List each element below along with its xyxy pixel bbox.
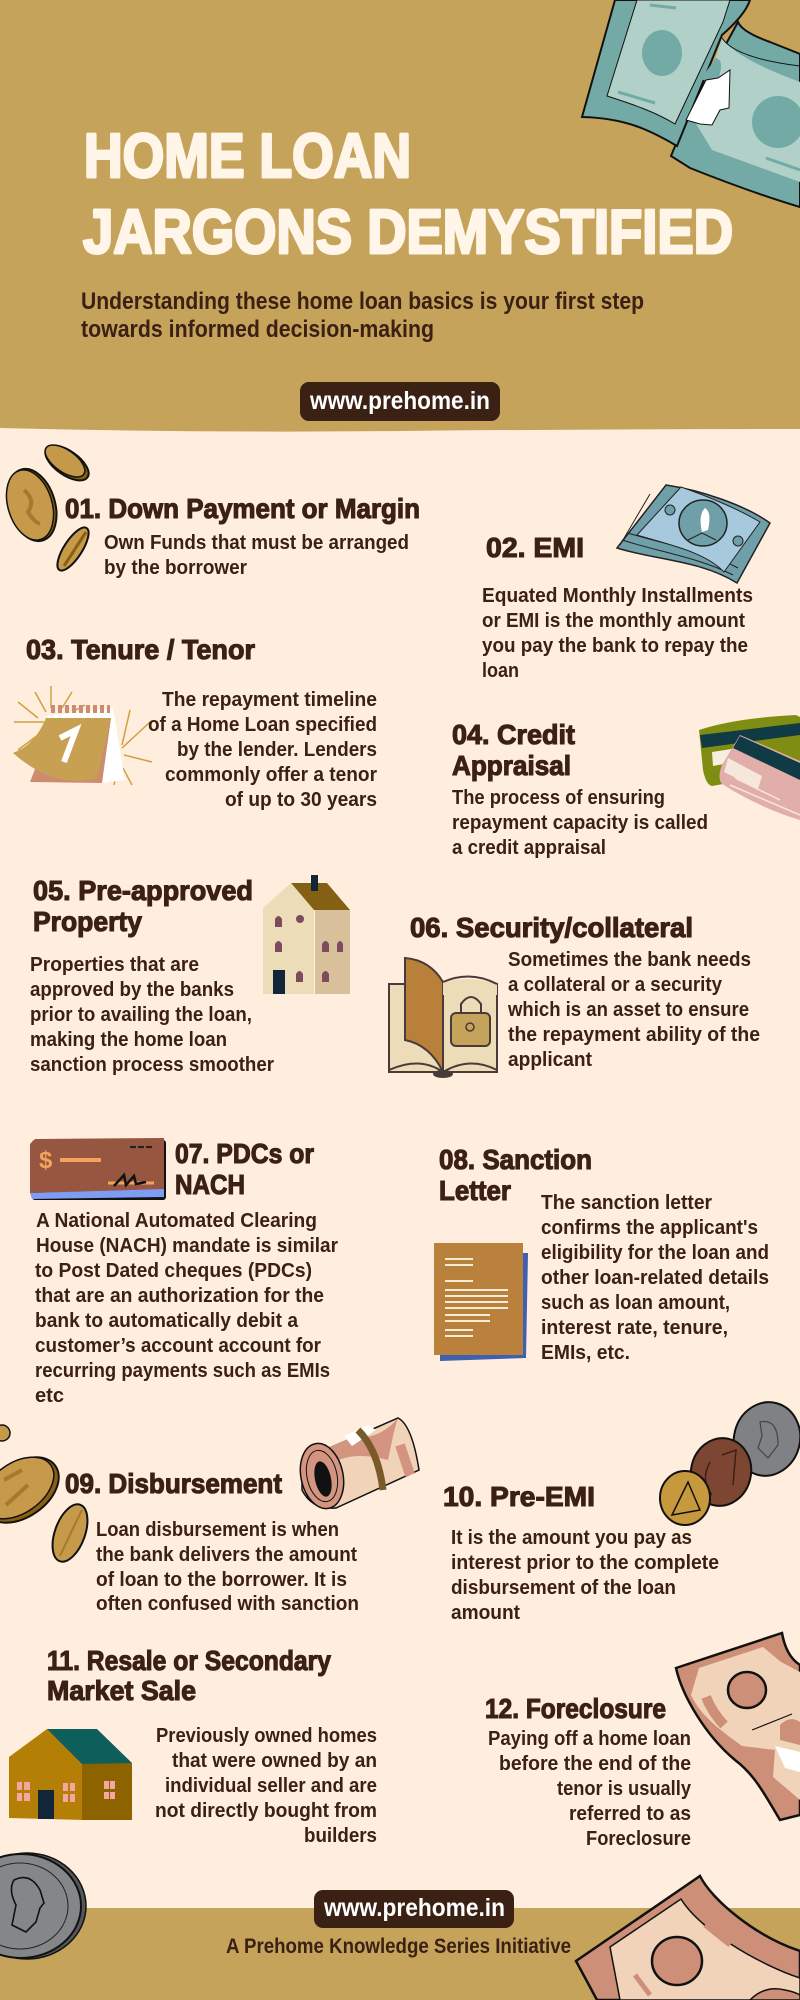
heading: 09. Disbursement	[65, 1468, 282, 1499]
heading: 05. Pre-approved	[33, 875, 253, 906]
description: bank to automatically debit a	[35, 1310, 299, 1332]
description: Paying off a home loan	[488, 1728, 691, 1750]
icon: cheque: $	[39, 1147, 53, 1174]
icon: small house	[9, 1729, 132, 1820]
tagline: A Prehome Knowledge Series Initiative	[226, 1935, 571, 1958]
description: customer’s account account for	[35, 1335, 321, 1357]
subtitle: towards informed decision-making	[81, 316, 434, 343]
icon: three coins	[660, 1395, 800, 1525]
description: which is an asset to ensure	[507, 999, 749, 1021]
description: of up to 30 years	[225, 789, 377, 811]
heading: Letter	[439, 1175, 511, 1206]
heading	[452, 719, 575, 781]
description: of loan to the borrower. It is	[96, 1569, 347, 1591]
panel: 07 PDCs or NACH	[30, 1138, 338, 1407]
description: that were owned by an	[172, 1750, 377, 1772]
description: you pay the bank to repay the	[482, 635, 748, 657]
icon: tall house	[263, 875, 350, 994]
description: repayment capacity is called	[452, 812, 708, 834]
icon: cheque	[30, 1138, 166, 1200]
description: confirms the applicant's	[541, 1217, 758, 1239]
heading: 02. EMI	[486, 532, 584, 563]
description	[451, 1527, 719, 1624]
description: such as loan amount,	[541, 1292, 730, 1314]
description: referred to as	[569, 1803, 691, 1825]
website pill: www.prehome.in	[309, 387, 490, 415]
description: disbursement of the loan	[451, 1577, 676, 1599]
subtitle: Understanding these home loan basics is your first step	[81, 288, 644, 315]
description: A National Automated Clearing	[36, 1210, 317, 1232]
description: Equated Monthly Installments	[482, 585, 753, 607]
icon: document	[434, 1243, 528, 1361]
description: prior to availing the loan,	[30, 1004, 252, 1026]
description: Sometimes the bank needs	[508, 949, 751, 971]
website pill	[300, 382, 500, 421]
heading: 03. Tenure / Tenor	[26, 634, 255, 665]
panel: 09 disbursement	[0, 1418, 419, 1615]
description: that are an authorization for the	[35, 1285, 324, 1307]
panel: 03 tenure	[13, 634, 377, 811]
description: applicant	[508, 1049, 592, 1071]
description: before the end of the	[499, 1753, 691, 1775]
icon: banknote roll	[295, 1418, 419, 1513]
description: by the lender. Lenders	[177, 739, 377, 761]
icon: banknote	[676, 1633, 800, 1820]
footer banner	[0, 1853, 800, 2000]
description	[482, 585, 753, 682]
description	[507, 949, 760, 1071]
description: often confused with sanction	[96, 1593, 359, 1615]
description	[30, 954, 274, 1076]
heading: 11. Resale or Secondary	[47, 1645, 331, 1676]
description: commonly offer a tenor	[165, 764, 377, 786]
description: approved by the banks	[30, 979, 234, 1001]
description: etc	[35, 1385, 64, 1407]
description: The repayment timeline	[162, 689, 377, 711]
panel: 06 security	[389, 912, 760, 1078]
description: recurring payments such as EMIs	[35, 1360, 330, 1382]
description: making the home loan	[30, 1029, 227, 1051]
icon: book and padlock	[389, 958, 497, 1078]
icon: grey coin	[0, 1853, 86, 1959]
description: House (NACH) mandate is similar	[36, 1235, 338, 1257]
description: tenor is usually	[557, 1778, 692, 1800]
description: Loan disbursement is when	[96, 1519, 339, 1541]
description	[541, 1192, 769, 1364]
description: a collateral or a security	[508, 974, 723, 996]
heading: NACH	[175, 1169, 245, 1200]
icon: calendar	[13, 686, 152, 785]
header banner	[0, 0, 800, 432]
description: of a Home Loan specified	[148, 714, 377, 736]
panel: 08 sanction letter	[434, 1144, 769, 1364]
heading: 08. Sanction	[439, 1144, 592, 1175]
heading: 06. Security/collateral	[410, 912, 693, 943]
heading	[47, 1645, 331, 1706]
icon: banknote stack	[617, 485, 770, 583]
subtitle	[81, 288, 644, 343]
heading	[33, 875, 253, 937]
heading: 04. Credit	[452, 719, 575, 750]
description	[155, 1725, 377, 1847]
heading: 07. PDCs or	[175, 1138, 314, 1169]
heading: Market Sale	[47, 1675, 196, 1706]
icon: banknote bottom right	[576, 1876, 800, 2000]
icon: credit cards	[699, 715, 800, 820]
description	[35, 1210, 338, 1407]
heading	[439, 1144, 592, 1206]
description	[96, 1519, 359, 1615]
description	[452, 787, 708, 859]
heading: 01. Down Payment or Margin	[65, 493, 420, 524]
heading: Property	[33, 906, 142, 937]
heading: 10. Pre-EMI	[443, 1481, 595, 1512]
website pill	[314, 1890, 514, 1928]
description: The sanction letter	[541, 1192, 712, 1214]
description: Properties that are	[30, 954, 199, 976]
description: a credit appraisal	[452, 837, 606, 859]
description: interest rate, tenure,	[541, 1317, 728, 1339]
icon: banknotes top right	[582, 0, 800, 207]
website pill: www.prehome.in	[323, 1894, 505, 1922]
panel: 12 foreclosure	[485, 1633, 800, 1850]
title	[83, 122, 733, 267]
description: or EMI is the monthly amount	[482, 610, 745, 632]
description: Own Funds that must be arranged	[104, 532, 409, 554]
heading	[175, 1138, 314, 1200]
description: interest prior to the complete	[451, 1552, 719, 1574]
description	[488, 1728, 692, 1850]
title: HOME LOAN	[84, 122, 411, 191]
description: other loan-related details	[541, 1267, 769, 1289]
description: EMIs, etc.	[541, 1342, 630, 1364]
description: the bank delivers the amount	[96, 1544, 357, 1566]
description: the repayment ability of the	[508, 1024, 760, 1046]
description: Foreclosure	[586, 1828, 691, 1850]
panel: 05 pre-approved property	[30, 875, 350, 1076]
description: amount	[451, 1602, 520, 1624]
description: loan	[482, 660, 519, 682]
panel: 02 EMI	[482, 485, 770, 682]
description: The process of ensuring	[452, 787, 665, 809]
panel: 11 resale	[9, 1645, 377, 1847]
description: It is the amount you pay as	[451, 1527, 692, 1549]
heading: Appraisal	[452, 750, 571, 781]
description: eligibility for the loan and	[541, 1242, 769, 1264]
heading: 12. Foreclosure	[485, 1693, 666, 1724]
panel: 01 down payment	[0, 439, 420, 579]
panel: 04 credit appraisal	[452, 715, 800, 859]
description: to Post Dated cheques (PDCs)	[35, 1260, 312, 1282]
description: by the borrower	[104, 557, 247, 579]
description: Previously owned homes	[156, 1725, 377, 1747]
description: individual seller and are	[165, 1775, 377, 1797]
description: builders	[304, 1825, 377, 1847]
description	[148, 689, 377, 811]
panel: 10 pre-EMI	[443, 1395, 800, 1624]
icon: gold coins	[0, 1425, 94, 1566]
description	[104, 532, 409, 579]
description: sanction process smoother	[30, 1054, 274, 1076]
description: not directly bought from	[155, 1800, 377, 1822]
icon: gold coins	[0, 439, 94, 575]
